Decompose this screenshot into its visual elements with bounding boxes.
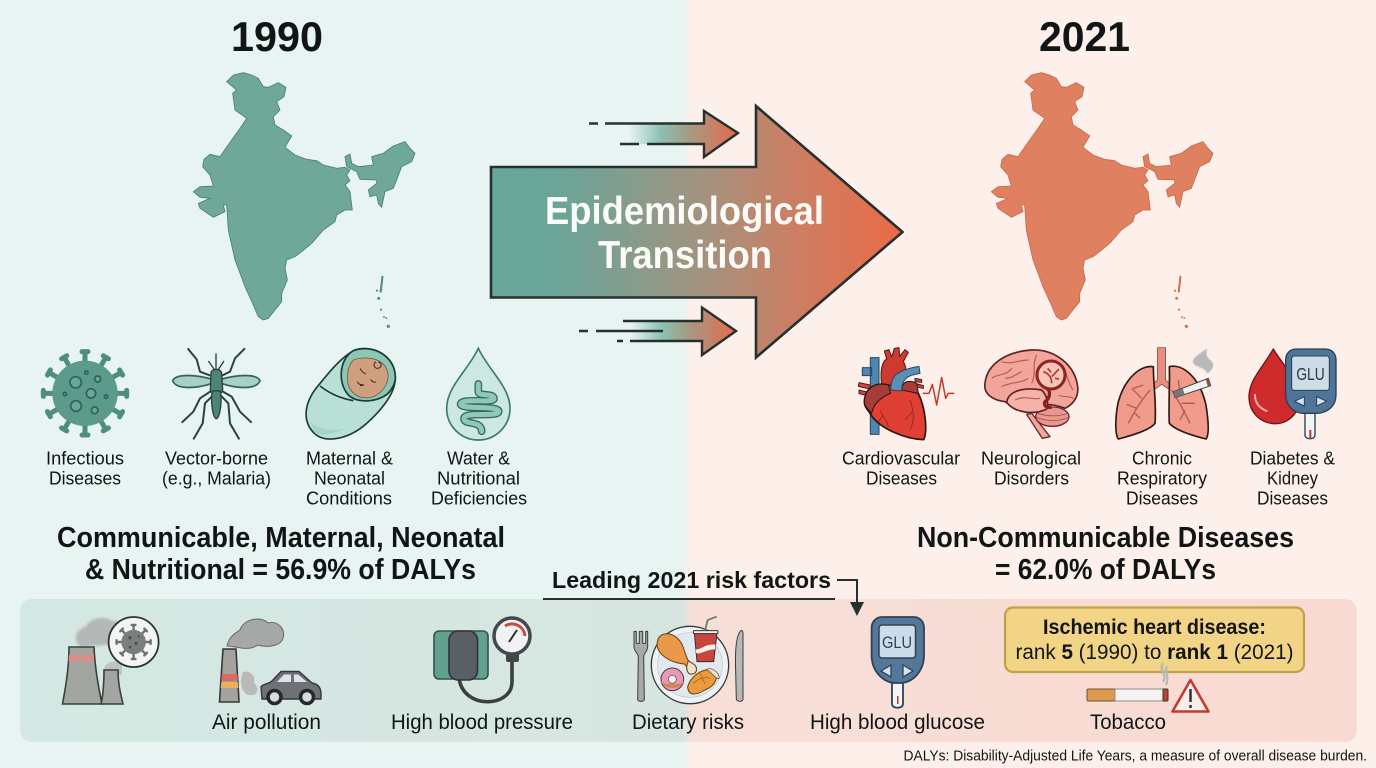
meter readout: GLU [1296,364,1325,384]
icon: swaddled baby (maternal and neonatal) [306,349,395,439]
label: Water & Nutritional Deficiencies: Deficiencies [431,488,527,508]
label: Cardiovascular Diseases: Diseases [866,468,937,488]
heading: leading 2021 risk factors with pointer: Leading 2021 risk factors [552,567,831,593]
summary: non-communicable share: = 62.0% of DALYs [995,554,1216,586]
panel: leading risk factors band [20,599,1357,742]
label: Vector-borne [162,448,271,488]
background: right 2021 half [687,0,1376,768]
heading: 2021: 2021 [1039,13,1130,60]
icon: blood drop and glucose meter [1249,349,1336,439]
icon: virus (infectious diseases) [43,352,127,435]
label: Cardiovascular Diseases [842,448,960,488]
label: Vector-borne: Vector-borne [165,448,268,468]
icon: dietary risks plate [634,617,743,704]
label: Neurological Disorders: Disorders [994,468,1069,488]
label: Diabetes & Kidney Diseases: Diabetes & [1250,448,1335,468]
label: Vector-borne: (e.g., Malaria) [162,468,271,488]
icon: heart with ECG trace [858,348,954,440]
label: Dietary risks: Dietary risks [632,711,744,734]
arrow: main Epidemiological Transition arrow [491,106,902,358]
summary: non-communicable share [917,522,1294,586]
label: Neurological Disorders: Neurological [981,448,1081,468]
label: Infectious Diseases: Infectious [46,448,124,468]
label: Water & Nutritional Deficiencies: Nutritional [437,468,520,488]
arrow: small lower transition arrow [579,308,736,355]
icon: glucose meter [872,617,924,708]
label: Water & Nutritional Deficiencies: Water & [447,448,510,468]
label: Air pollution: Air pollution [212,711,321,734]
icon: lungs with cigarette [1116,348,1213,439]
label: Cardiovascular Diseases: Cardiovascular [842,448,960,468]
label: Water & Nutritional Deficiencies [431,448,527,508]
label: Diabetes & Kidney Diseases [1250,448,1335,508]
label: High blood glucose: High blood glucose [810,711,985,734]
label: High blood pressure: High blood pressure [391,711,573,734]
icon: cigarette with warning sign [1087,663,1208,712]
label: Maternal & Neonatal Conditions [306,448,393,508]
arrow label second line: Transition [598,234,772,277]
label: Diabetes & Kidney Diseases: Kidney [1267,468,1318,488]
meter readout: GLU [882,633,912,652]
heading: leading 2021 risk factors with pointer [543,567,864,616]
icon: power plant with virus bubble [62,617,159,704]
label: Tobacco: Tobacco [1090,711,1166,734]
map: India 2021 [991,73,1213,327]
icon: water drop with intestines [447,348,510,440]
label: Chronic Respiratory Diseases: Respiratory [1117,468,1207,488]
label: Infectious Diseases: Diseases [49,468,121,488]
label: Chronic Respiratory Diseases [1117,448,1207,508]
label: Neurological Disorders [981,448,1081,488]
summary: non-communicable share: Non-Communicable Diseases [917,522,1294,554]
icon: brain with stroke highlight [985,350,1078,438]
summary: communicable share [57,522,505,586]
summary: communicable share: Communicable, Maternal, Neonatal [57,522,505,554]
arrow label: Epidemiological [545,190,824,233]
label: Maternal & Neonatal Conditions: Maternal & [306,448,393,468]
summary: communicable share: & Nutritional = 56.9% of DALYs [85,554,476,586]
label: Chronic Respiratory Diseases: Diseases [1126,488,1198,508]
label: Maternal & Neonatal Conditions: Conditions [306,488,392,508]
callout: ischemic heart disease rank: rank 5 (1990) to rank 1 (2021) [1016,641,1294,664]
map: India 1990 [193,73,415,327]
icon: blood pressure cuff and gauge [434,618,530,702]
callout: ischemic heart disease rank [1005,608,1304,672]
label: Diabetes & Kidney Diseases: Diseases [1257,488,1328,508]
icon: chimney and car exhaust [220,619,321,704]
arrow: small upper transition arrow [589,111,738,157]
label: Chronic Respiratory Diseases: Chronic [1132,448,1192,468]
label: Infectious Diseases [46,448,124,488]
background: left 1990 half [0,0,687,768]
label: Maternal & Neonatal Conditions: Neonatal [314,468,385,488]
heading: 1990: 1990 [231,13,323,60]
callout: ischemic heart disease rank: Ischemic heart disease: [1043,616,1266,639]
icon: mosquito (vector-borne) [173,348,260,439]
